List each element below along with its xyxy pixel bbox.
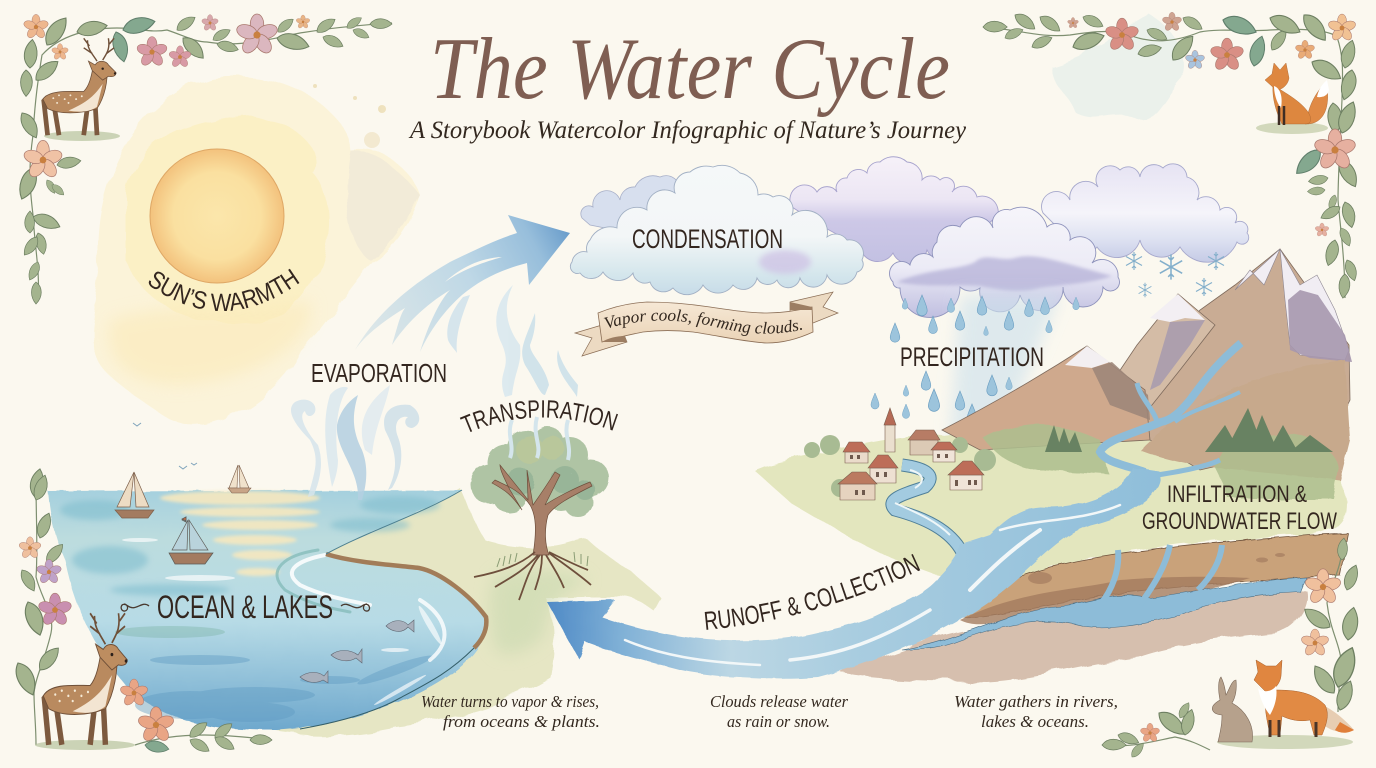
border: top-left vine [15,13,392,304]
caption: evaporation: Water turns to vapor & rises, [421,692,599,711]
transpiration wisps [496,285,578,397]
subtitle: A Storybook Watercolor Infographic of Nature’s Journey [408,117,967,144]
boat: far left [115,472,154,518]
border: top-right vine [983,10,1362,299]
caption: precipitation: Clouds release water [710,692,848,711]
banner: vapor cools [574,292,839,357]
swirling currents near the shore [277,550,444,660]
fox tail [1318,705,1354,732]
caption: precipitation: as rain or snow. [727,712,830,731]
panel: rain cloud [889,207,1120,317]
title: The Water Cycle [430,21,950,118]
banner: vapor cools: Vapor cools, forming clouds. [604,309,802,336]
pine trees [1045,408,1333,452]
grass tufts [497,552,588,567]
caption: evaporation: from oceans & plants. [443,712,600,731]
rain drops [871,295,1079,440]
caption: precipitation [710,692,848,731]
panel: ocean and lakes [48,423,486,730]
label: sun's warmth: SUN’S WARMTH [148,268,300,311]
panel: rivers [892,343,1241,552]
label: transpiration: TRANSPIRATION [460,400,618,432]
label: precipitation: PRECIPITATION [900,342,1044,372]
birds [133,423,197,469]
caption: collection: lakes & oceans. [981,712,1089,731]
coast line [326,554,486,648]
condensation cloud [570,165,863,295]
caption: collection: Water gathers in rivers, [954,692,1118,711]
icon: fox top-right [1256,63,1329,134]
vapor wisps [291,385,419,500]
lavender cloud [790,157,998,264]
sunlit water patches [160,491,320,576]
ornament swirls [121,604,369,611]
fish [300,620,414,683]
panel: soil layers [841,533,1348,682]
label: infiltration and groundwater flow [1142,481,1337,535]
boat: near [169,517,213,564]
caption: evaporation [421,692,600,731]
icon: village [804,408,996,500]
icon: deer bottom-left [35,613,135,750]
border: bottom-right vine [1102,538,1361,759]
label: condensation: CONDENSATION [632,224,783,254]
icon: deer top-left [43,38,120,141]
panel: shore land [270,490,660,734]
boat: distant [228,465,251,493]
icon: sun disc [150,149,284,283]
label: infiltration and groundwater flow: INFILTRATION & [1167,481,1307,508]
panel: sun and warm wash [91,76,420,425]
right cloud [1042,164,1249,262]
label: evaporation: EVAPORATION [311,358,447,388]
label: runoff and collection: RUNOFF & COLLECTION [704,554,920,630]
caption: collection [954,692,1118,731]
wisps over tree [510,417,569,460]
panel: clouds [570,157,1249,295]
fox head [1254,660,1282,692]
tree trunk and roots [492,465,592,555]
icon: rabbit and fox [1212,660,1354,749]
snowflakes [1126,252,1224,297]
icon: evaporation arrow [291,215,570,500]
icon: runoff arrow joining the river [547,468,1160,678]
label: ocean and lakes: OCEAN & LAKES [157,589,333,625]
decorative splashes [313,84,386,148]
teal water blotches [60,496,440,596]
fox body [1265,690,1327,735]
tree crown [470,427,609,517]
border: bottom-left vine [11,468,272,755]
back lobe of condensation cloud [581,176,680,235]
river highlights [625,505,1120,665]
icon: tree [470,417,609,600]
panel: land and mountains [754,249,1352,590]
